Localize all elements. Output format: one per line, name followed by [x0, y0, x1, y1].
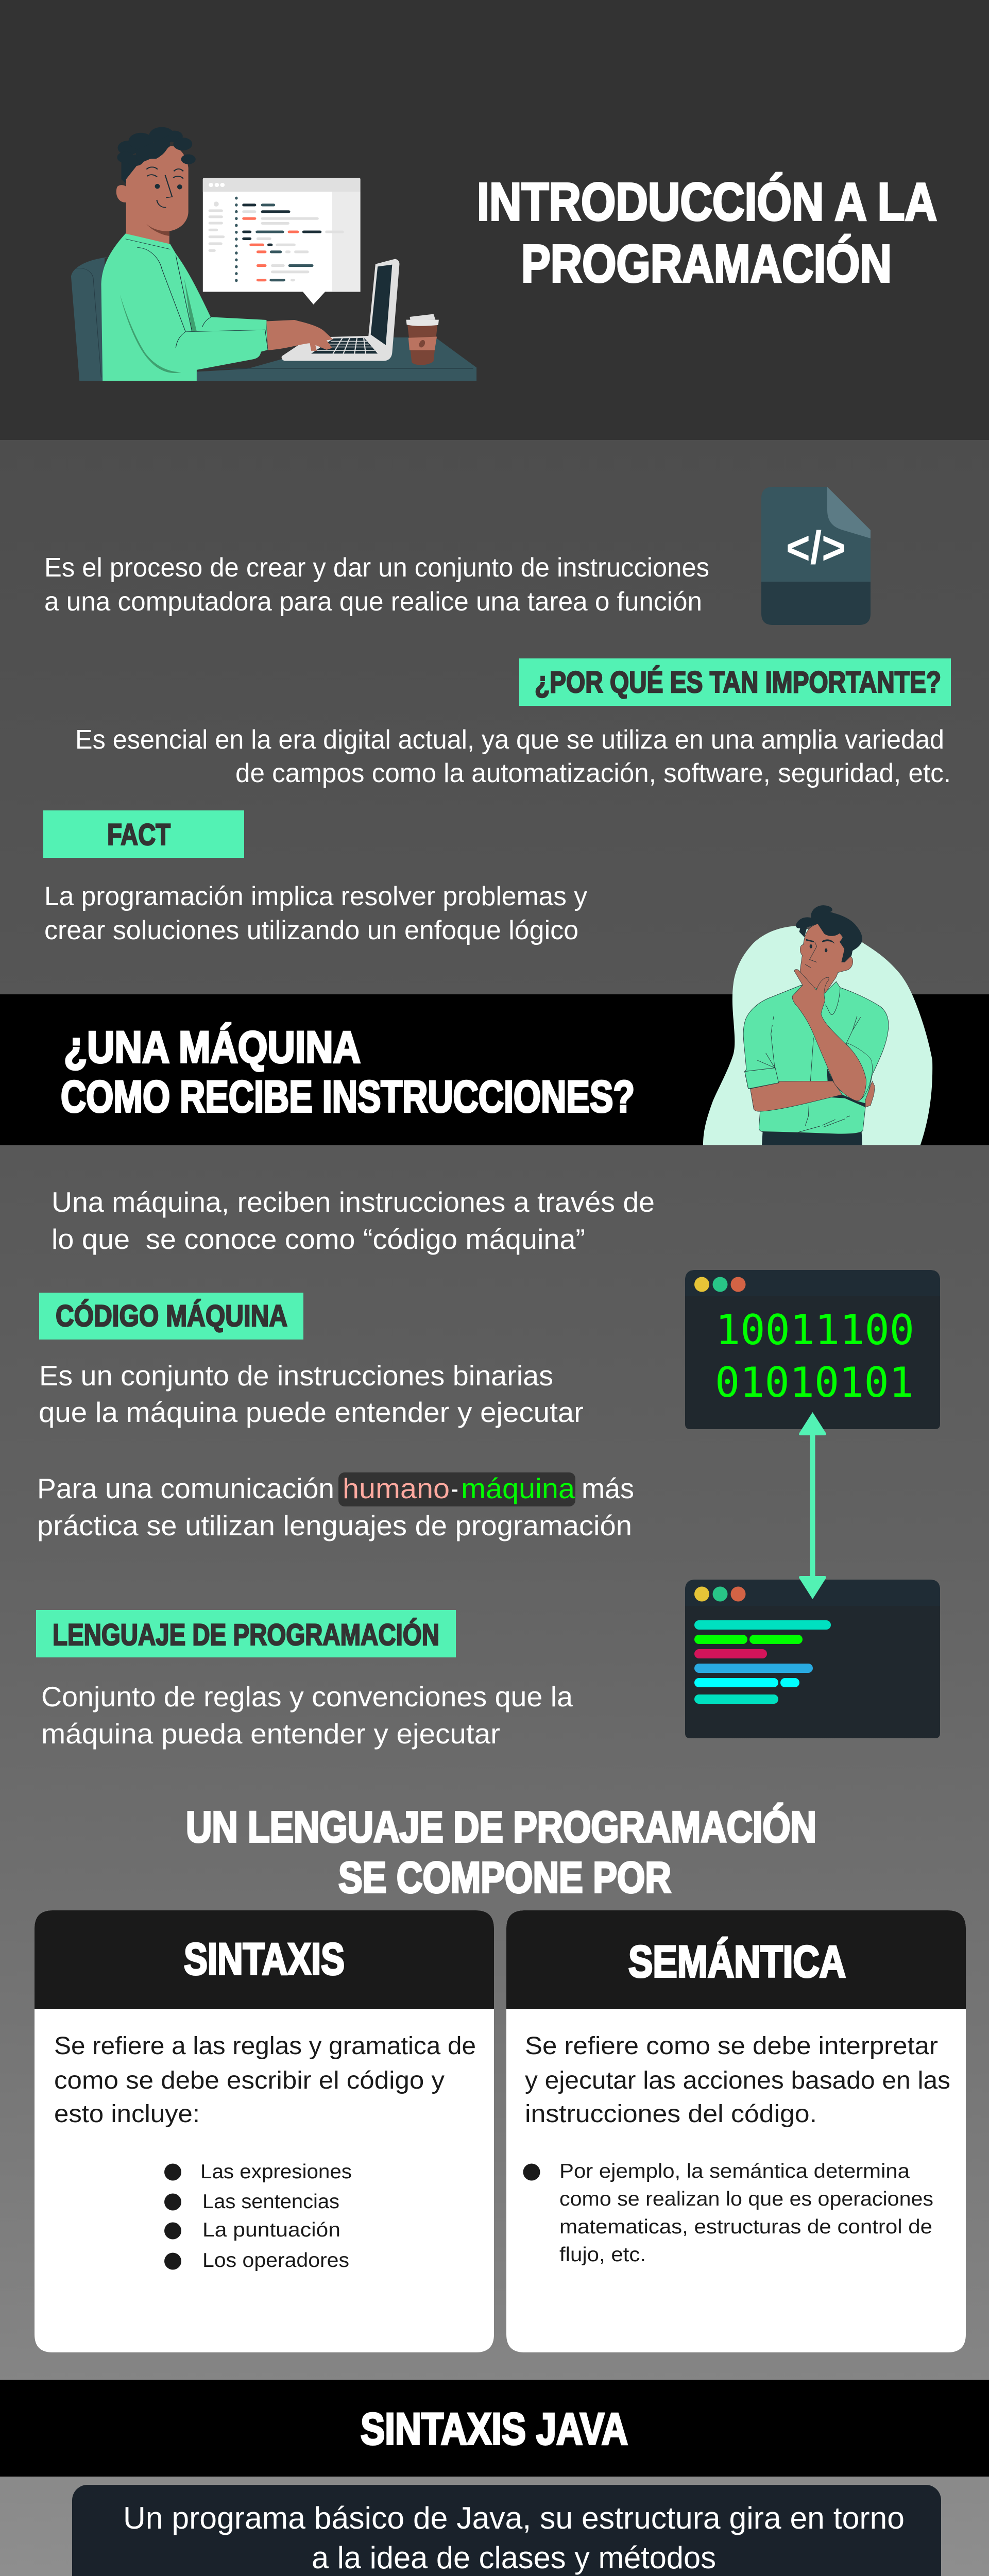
label: fact: FACT	[107, 818, 170, 852]
card text: Se refiere como se debe interpretar	[525, 2032, 938, 2060]
card text: como se debe escribir el código y	[54, 2067, 445, 2094]
heading: una máquina: ¿UNA MÁQUINA	[64, 1023, 361, 1072]
label: fact	[43, 810, 244, 858]
panel: java intro	[72, 2485, 941, 2576]
text block: fact: crear soluciones utilizando un enfoque lógico	[44, 916, 578, 945]
label: lenguaje de programación: LENGUAJE DE PROGRAMACIÓN	[53, 1618, 439, 1652]
text block: fact: La programación implica resolver problemas y	[44, 882, 587, 911]
label: lenguaje de programación	[36, 1610, 456, 1657]
title: PROGRAMACIÓN	[521, 234, 892, 293]
bullet text: Por ejemplo, la semántica determina	[559, 2160, 910, 2182]
heading: una máquina: COMO RECIBE INSTRUCCIONES?	[61, 1072, 635, 1122]
card text: y ejecutar las acciones basado en las	[525, 2067, 950, 2094]
text block: humano-máquina	[37, 1472, 634, 1541]
text block: código máquina	[39, 1360, 584, 1428]
band: sintaxis java	[0, 2380, 989, 2477]
arrow: two-way between windows	[799, 1412, 826, 1599]
bullet text	[523, 2160, 933, 2266]
bullet list	[164, 2161, 352, 2272]
card text	[525, 2032, 950, 2128]
bullet list: Los operadores	[202, 2249, 349, 2272]
bullet list: Las expresiones	[200, 2161, 352, 2183]
text block: código máquina intro	[52, 1186, 655, 1255]
text block: lenguaje de programación: Conjunto de reglas y convenciones que la	[41, 1681, 573, 1713]
bullet list: La puntuación	[202, 2219, 340, 2241]
heading: se compone por: SE COMPONE POR	[338, 1853, 671, 1902]
illustration: developer at laptop	[71, 127, 476, 381]
label: código máquina: CÓDIGO MÁQUINA	[56, 1299, 287, 1333]
window: binary code: 01010101	[715, 1359, 914, 1406]
panel: java intro: Un programa básico de Java, su estructura gira en torno	[123, 2501, 905, 2535]
bullet text: flujo, etc.	[559, 2244, 646, 2266]
card text	[54, 2032, 476, 2128]
card: semántica	[506, 1910, 966, 2352]
icon: code file: </>	[786, 522, 846, 574]
card text: instrucciones del código.	[525, 2100, 817, 2128]
heading: se compone por	[186, 1803, 816, 1902]
heading: se compone por: UN LENGUAJE DE PROGRAMACIÓN	[186, 1803, 816, 1851]
card heading: SINTAXIS	[184, 1935, 345, 1984]
card text: Se refiere a las reglas y gramatica de	[54, 2032, 476, 2060]
band: sintaxis java: SINTAXIS JAVA	[361, 2404, 628, 2454]
text block: definition: Es el proceso de crear y dar un conjunto de instrucciones	[44, 553, 709, 583]
text block: importance	[75, 725, 951, 788]
text block: humano-máquina: Para una comunicación	[37, 1472, 334, 1504]
band: máquina heading	[0, 994, 989, 1145]
text block: fact	[44, 882, 587, 945]
text block: importance: de campos como la automatización, software, seguridad, etc.	[235, 758, 951, 788]
text block: humano-máquina: -	[451, 1472, 458, 1504]
text block: definition: a una computadora para que realice una tarea o función	[44, 587, 702, 617]
icon: code file	[761, 487, 871, 625]
card: sintaxis	[35, 1910, 494, 2352]
text block: código máquina: Es un conjunto de instrucciones binarias	[39, 1360, 553, 1392]
illustration: thinking man	[703, 905, 932, 1145]
text block: humano-máquina: máquina	[461, 1472, 575, 1504]
window: binary code	[685, 1270, 940, 1429]
text block: lenguaje de programación: máquina pueda entender y ejecutar	[41, 1718, 500, 1750]
panel: java intro: a la idea de clases y métodos	[312, 2540, 716, 2575]
text block: humano-máquina: práctica se utilizan lenguajes de programación	[37, 1510, 632, 1541]
label: código máquina	[39, 1293, 303, 1340]
bullet text: como se realizan lo que es operaciones	[559, 2188, 933, 2210]
text block: definition	[44, 553, 709, 617]
label: por qué es tan importante	[519, 658, 951, 706]
header band	[0, 0, 989, 440]
heading: una máquina	[61, 1023, 635, 1122]
card text: esto incluye:	[54, 2100, 200, 2128]
bullet text: matematicas, estructuras de control de	[559, 2216, 932, 2238]
title	[477, 172, 937, 293]
text block: humano-máquina: humano	[343, 1472, 450, 1504]
window: binary code: 10011100	[715, 1306, 914, 1354]
window: programming language code	[685, 1580, 940, 1738]
bullet list: Las sentencias	[202, 2191, 339, 2213]
card heading: SEMÁNTICA	[628, 1937, 846, 1987]
text block: código máquina intro: Una máquina, reciben instrucciones a través de	[52, 1186, 655, 1218]
text block: humano-máquina: más	[582, 1472, 634, 1504]
text block: lenguaje de programación	[41, 1681, 573, 1750]
text block: código máquina intro: lo que se conoce como “código máquina”	[52, 1223, 585, 1255]
text block: código máquina: que la máquina puede entender y ejecutar	[39, 1396, 584, 1428]
text block: importance: Es esencial en la era digital actual, ya que se utiliza en una amplia variedad	[75, 725, 944, 755]
